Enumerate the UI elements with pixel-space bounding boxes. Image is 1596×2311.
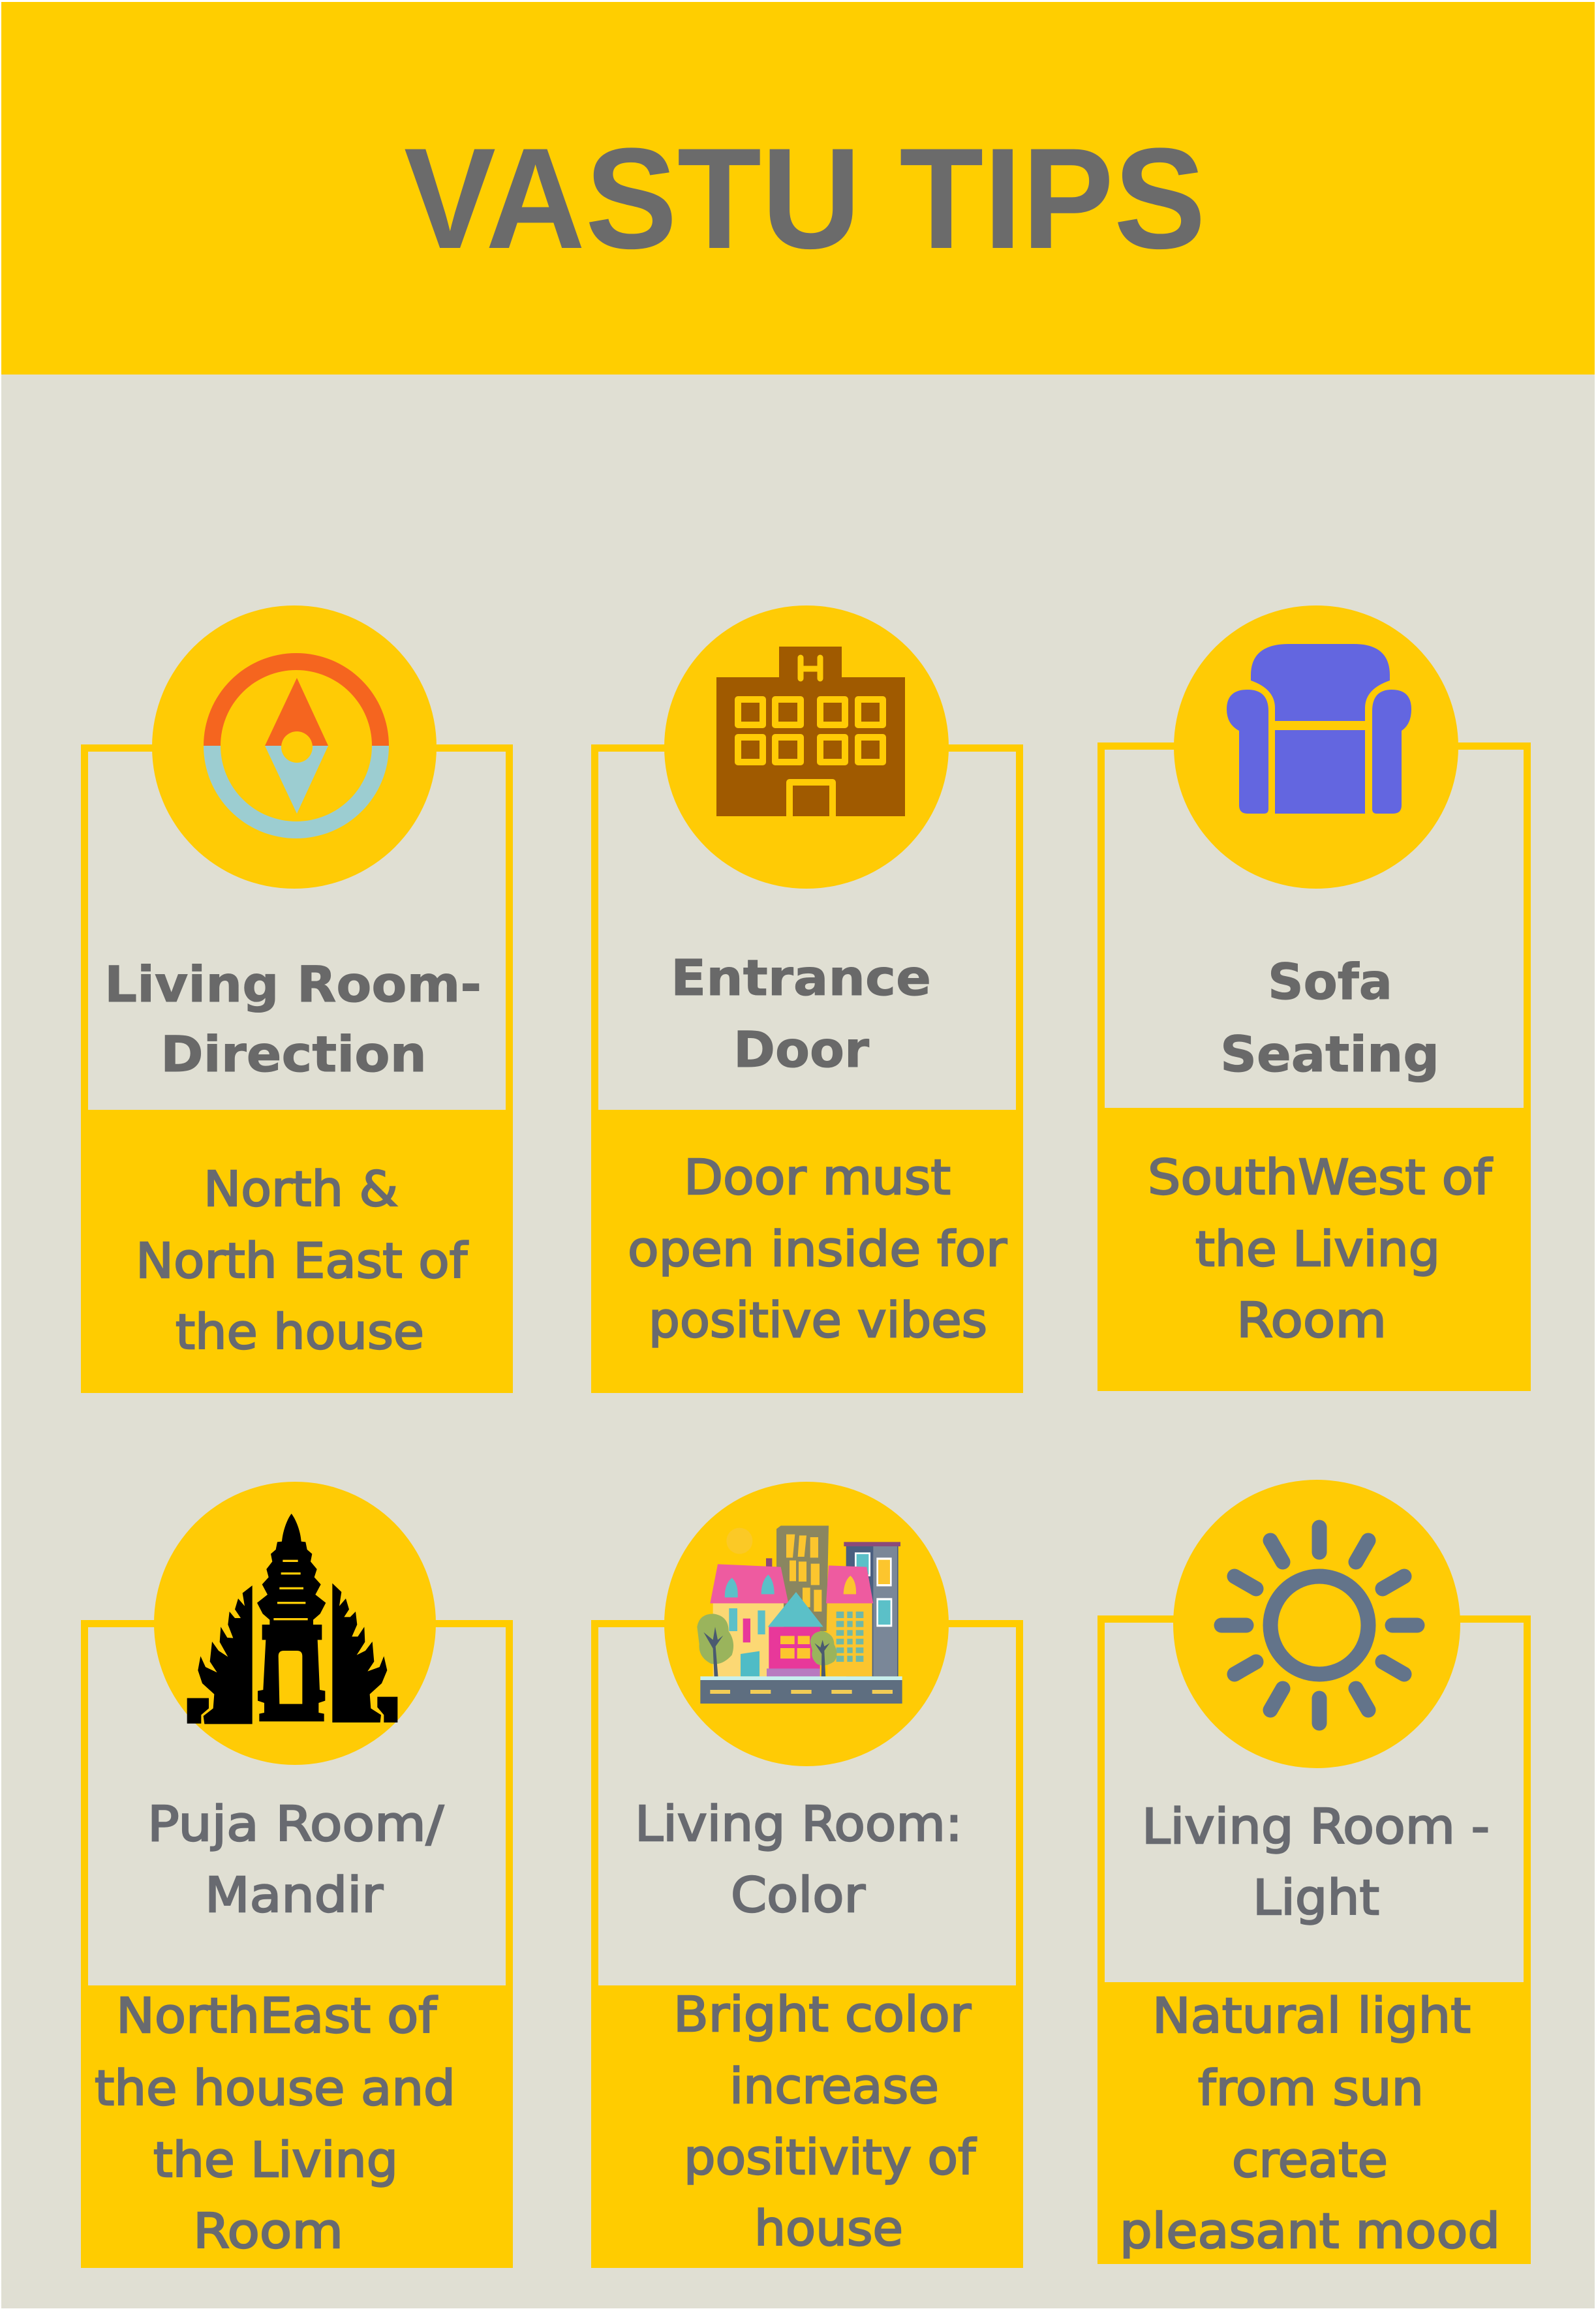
header banner [1,2,1595,375]
text: northeast of the house [95,1988,455,2259]
panel: living room color [591,1482,1023,2268]
heading: Living Room Color: Living Room: [635,1796,962,1852]
heading: Living Room Light: Light [1253,1870,1379,1926]
text: bright color: Bright color [673,1987,972,2043]
text: northeast of the house: Room [193,2203,343,2259]
text: northeast of the house: NorthEast of [116,1988,438,2044]
heading: Sofa Seating: Sofa [1268,953,1392,1011]
text: door must open inside: open inside for [628,1221,1007,1278]
heading: Living Room Light [1142,1799,1490,1926]
text: natural light [1120,1988,1500,2259]
text: door must open inside: positive vibes [649,1293,987,1349]
text: southwest of living room: Room [1236,1293,1387,1349]
text: natural light: create [1232,2132,1388,2188]
heading: Living Room Color [635,1796,962,1923]
panel: living room light [1097,1480,1531,2264]
heading: Puja Room/ Mandir: Puja Room/ [147,1796,444,1852]
panel: entrance door [591,605,1023,1393]
text: natural light: pleasant mood [1120,2203,1500,2259]
icon: temple gate [187,1514,397,1724]
text: southwest of living room [1148,1150,1493,1349]
text: bright color: increase [729,2058,939,2115]
title: VASTU TIPS [404,118,1206,279]
heading: Living Room-Direction: Direction [161,1025,427,1083]
panel: living room direction [81,605,513,1393]
icon: armchair [1227,644,1411,814]
text: southwest of living room: SouthWest of [1148,1150,1493,1206]
text: door must open inside: Door must [684,1150,951,1206]
heading: Living Room-Direction: Living Room- [104,955,482,1013]
heading: Sofa Seating: Seating [1220,1025,1439,1083]
heading: Living Room Light: Living Room - [1142,1799,1490,1855]
heading: Puja Room/ Mandir [147,1796,444,1923]
text: bright color: positivity of [684,2130,977,2186]
text: natural light: from sun [1198,2060,1424,2117]
heading: Living Room-Direction [104,955,482,1083]
text: north and north east: the house [176,1304,424,1360]
text: north and north east: North East of [136,1233,468,1289]
text: bright color: house [754,2201,903,2257]
heading: Sofa Seating [1220,953,1439,1083]
heading: Puja Room/ Mandir: Mandir [205,1867,384,1923]
text: north and north east [136,1161,468,1360]
heading: Entrance Door: Entrance [671,949,931,1007]
heading: Entrance Door: Door [733,1020,870,1079]
text: northeast of the house: the house and [95,2060,455,2117]
text: northeast of the house: the Living [153,2132,398,2188]
icon: sun [1221,1527,1417,1723]
icon: compass [204,653,389,838]
text: door must open inside [628,1150,1007,1349]
text: north and north east: North & [204,1161,398,1217]
text: bright color [673,1987,977,2257]
icon: colorful city [697,1525,902,1704]
panel: puja room [81,1482,513,2268]
text: natural light: Natural light [1152,1988,1471,2044]
icon: hotel building [716,647,905,817]
text: southwest of living room: the Living [1195,1221,1440,1278]
heading: Living Room Color: Color [731,1867,866,1923]
panel: sofa seating [1097,605,1531,1391]
heading: Entrance Door [671,949,931,1079]
